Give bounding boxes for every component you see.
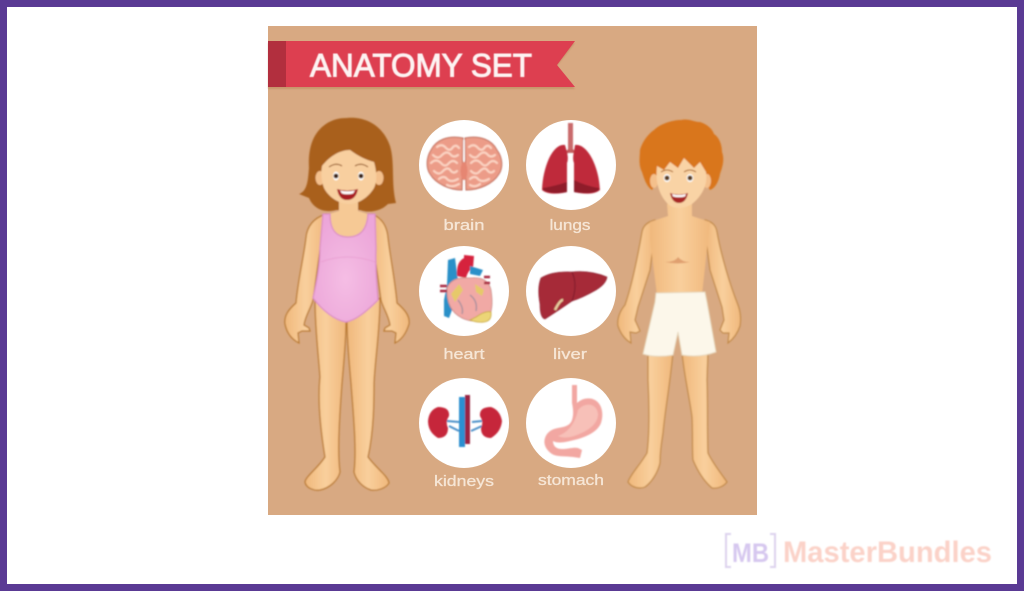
boy mouth <box>670 193 688 203</box>
girl neck and chest <box>322 198 374 242</box>
panel: anatomy poster <box>268 26 757 515</box>
girl mouth <box>337 189 358 200</box>
girl arms and hands <box>285 214 409 343</box>
boy arms and hands <box>618 220 741 343</box>
boy legs <box>628 352 727 488</box>
boy hair <box>640 119 723 190</box>
girl face <box>321 150 376 204</box>
label: kidneys: kidneys <box>434 473 494 490</box>
organ: heart <box>419 246 509 363</box>
title text: ANATOMY SET <box>310 48 532 84</box>
label: lungs: lungs <box>550 217 590 234</box>
boy torso <box>650 204 710 295</box>
label: liver: liver <box>553 346 587 363</box>
girl suit belly line <box>321 257 375 262</box>
organ: liver <box>526 246 616 363</box>
girl hair <box>299 118 396 212</box>
boy chest line <box>665 257 690 264</box>
organ: stomach <box>526 378 616 489</box>
organ: lungs <box>526 120 616 234</box>
girl ears <box>316 171 324 185</box>
boy eyes <box>661 170 696 182</box>
organ: kidneys <box>419 378 509 490</box>
figure: boy <box>618 119 741 488</box>
girl eyes <box>329 164 368 180</box>
title banner <box>268 41 575 89</box>
boy face <box>657 158 706 208</box>
panel: organs <box>419 120 616 490</box>
girl swimsuit <box>313 214 378 322</box>
boy ears <box>650 174 658 188</box>
logo wordmark: MasterBundles <box>783 536 992 569</box>
figure: girl <box>285 118 409 490</box>
poster background <box>268 26 757 515</box>
label: heart: heart <box>444 346 485 363</box>
logo mark: MB <box>732 538 769 568</box>
watermark logo <box>726 534 992 569</box>
organ: brain <box>419 120 509 234</box>
label: stomach: stomach <box>538 472 604 489</box>
boy shorts <box>643 292 716 356</box>
girl legs <box>305 298 389 490</box>
label: brain: brain <box>444 217 484 234</box>
